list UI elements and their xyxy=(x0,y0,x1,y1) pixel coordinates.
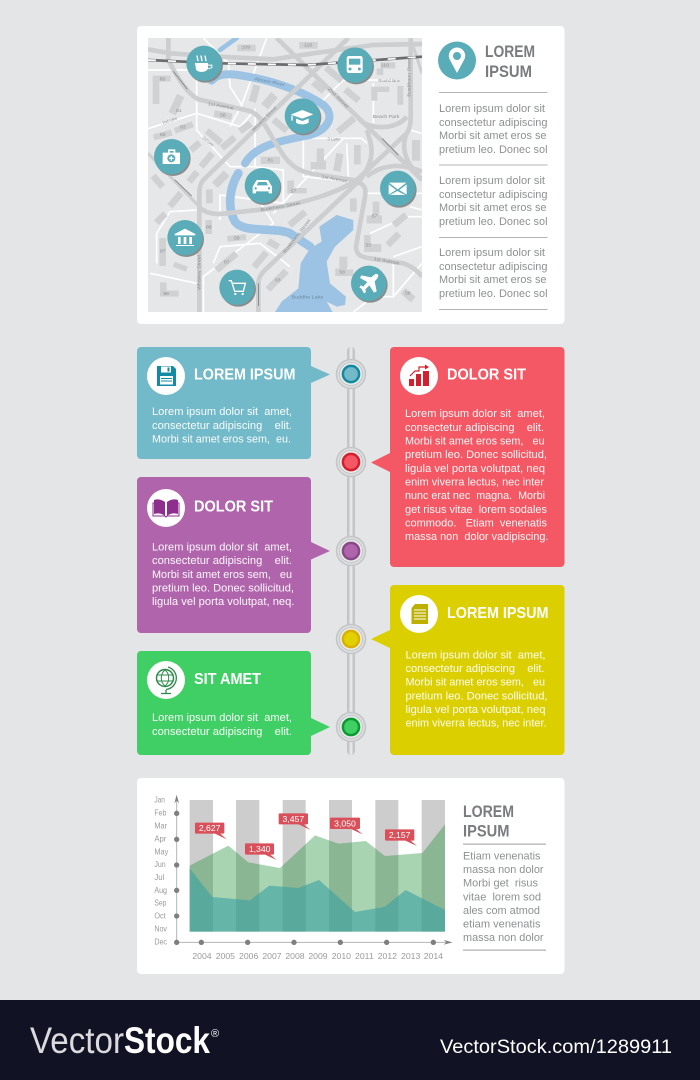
logo wordmark: Stock xyxy=(124,1020,210,1061)
callout: 2,627 xyxy=(195,823,227,839)
month labels: Dec xyxy=(154,936,168,946)
panel: green callout xyxy=(137,651,330,755)
callout: 2,627: 2,627 xyxy=(199,823,221,833)
text block: Morbi sit amet eros sem, eu xyxy=(152,569,292,581)
map labels: 81 xyxy=(268,158,274,163)
text block: location 1 xyxy=(439,103,548,156)
map labels: Beach Park xyxy=(373,114,400,119)
text block: ligula vel porta volutpat, neq. xyxy=(152,596,294,608)
year labels: 2004 xyxy=(192,951,212,961)
chart background bars xyxy=(190,800,445,932)
map labels: 83 xyxy=(180,125,186,130)
text block: massa non dolor vadipiscing. xyxy=(405,531,548,543)
year labels: 2005 xyxy=(216,951,235,961)
text block: ligula vel porta volutpat, neq xyxy=(405,463,545,475)
node: green xyxy=(336,712,366,742)
text block: Morbi sit amet eros sem, eu. xyxy=(152,434,291,446)
text block: chart description: ales com atmod xyxy=(463,905,540,917)
footer banner xyxy=(0,1000,700,1080)
node: red xyxy=(336,448,366,476)
logo wordmark xyxy=(30,1020,219,1061)
text block: Lorem ipsum dolor sit amet, xyxy=(405,408,545,420)
year labels: 2011 xyxy=(355,951,374,961)
text block xyxy=(152,406,292,446)
heading: map panel: LOREM xyxy=(485,43,535,61)
map labels: Buakhaou Street xyxy=(282,217,312,254)
map labels: 1st Avenue xyxy=(208,101,235,111)
month labels: Jun xyxy=(154,859,166,869)
text block: chart description xyxy=(463,850,544,944)
text block: chart description: massa non dolor xyxy=(463,932,544,944)
text block: location 1: consectetur adipiscing xyxy=(439,117,548,129)
callout: 1,340: 1,340 xyxy=(249,844,271,854)
text block: location 2 xyxy=(439,175,548,228)
location icon xyxy=(438,42,476,80)
map labels: 88 xyxy=(163,291,170,296)
node: blue xyxy=(336,360,366,388)
map labels: Buakhaou Street xyxy=(260,200,301,212)
map labels: 57 xyxy=(372,213,378,218)
month labels: Mar xyxy=(154,820,167,830)
text block: pretium leo. Donec sollicitud, xyxy=(152,582,294,594)
callout: 3,050 xyxy=(330,818,363,834)
year labels: 2012 xyxy=(378,951,397,961)
icon: rising bar chart xyxy=(400,357,438,395)
text block: enim viverra lectus, nec inter xyxy=(405,476,544,488)
text block: location 2: Morbi sit amet eros se xyxy=(439,202,546,214)
text block: ligula vel porta volutpat, neq xyxy=(406,704,546,716)
map labels: 58 xyxy=(405,291,411,296)
series: green area xyxy=(190,824,445,932)
callout: 3,050: 3,050 xyxy=(334,818,356,828)
month labels: Aug xyxy=(154,885,167,895)
map labels: Whiskey Street xyxy=(251,105,278,132)
heading: SIT AMET xyxy=(194,671,261,688)
heading: DOLOR SIT xyxy=(194,498,273,516)
panel: yellow callout xyxy=(371,585,564,755)
river and lake xyxy=(212,38,353,312)
panel: blue callout xyxy=(137,347,330,459)
icon: bank xyxy=(167,220,204,257)
text block: nunc erat nec magna. Morbi xyxy=(405,490,545,502)
map labels: 87 xyxy=(160,249,166,254)
icon: graduation cap xyxy=(285,98,321,135)
year labels: 2007 xyxy=(262,951,282,961)
buildings xyxy=(151,42,420,302)
map labels: Buddha Lake xyxy=(292,294,324,299)
icon: floppy disk xyxy=(147,357,185,395)
text block: chart description: vitae lorem sod xyxy=(463,892,541,904)
map labels: 82 xyxy=(160,132,166,137)
text block: consectetur adipiscing elit. xyxy=(152,726,292,738)
icon: bus xyxy=(337,47,374,84)
icon: car xyxy=(245,168,281,205)
text block: consectetur adipiscing elit. xyxy=(152,420,292,432)
image id: VectorStock.com/1289911 xyxy=(440,1036,672,1058)
panel: map and location list xyxy=(137,26,564,324)
icon: document xyxy=(400,595,438,633)
text block: location 3: Lorem ipsum dolor sit xyxy=(439,247,545,259)
icon: airplane xyxy=(351,266,388,303)
text block: location 3: Morbi sit amet eros se xyxy=(439,274,546,286)
map labels: 80 xyxy=(160,76,166,81)
text block: chart description: massa non dolor xyxy=(463,864,544,876)
map labels: 2nd Street xyxy=(327,86,351,110)
roads xyxy=(148,38,422,312)
text block: chart description: etiam venenatis xyxy=(463,918,541,930)
callout: 3,457 xyxy=(279,813,310,830)
map labels: 110 xyxy=(304,43,313,48)
icon: envelope xyxy=(380,171,417,208)
text block: location 2: consectetur adipiscing xyxy=(439,189,548,201)
map labels: 1st Avenue xyxy=(321,174,348,184)
heading: chart panel xyxy=(463,803,514,840)
heading: LOREM IPSUM xyxy=(194,366,296,384)
month labels: Feb xyxy=(154,808,166,818)
map labels: 2nd Lane xyxy=(201,135,215,148)
map labels: 3 Lane xyxy=(327,137,341,142)
month labels: Sep xyxy=(154,898,166,908)
year labels: 2010 xyxy=(332,951,351,961)
heading: LOREM IPSUM xyxy=(447,605,548,622)
callout: 1,340 xyxy=(245,843,277,860)
map labels: 58 xyxy=(339,269,346,274)
text block xyxy=(152,712,292,738)
month labels: Nov xyxy=(154,923,168,933)
text block: chart description: Morbi get risus xyxy=(463,878,538,890)
month labels: May xyxy=(154,846,169,856)
map labels: 88 xyxy=(206,225,212,230)
map labels: 83 xyxy=(275,278,281,283)
panel: purple callout xyxy=(137,477,330,633)
text block: consectetur adipiscing elit. xyxy=(406,663,544,675)
text block: get risus vitae lorem sodales xyxy=(405,504,547,516)
text block: commodo. Etiam venenatis xyxy=(405,518,547,530)
text block: location 3 xyxy=(439,247,548,300)
icon: open book xyxy=(147,489,185,527)
callout: 3,457: 3,457 xyxy=(282,814,304,824)
area chart xyxy=(154,795,453,961)
map labels: 58 xyxy=(234,235,240,240)
panel: red callout xyxy=(371,347,564,567)
icon: shopping cart xyxy=(219,270,256,307)
node: yellow xyxy=(336,624,366,654)
text block: location 1: Morbi sit amet eros se xyxy=(439,130,546,142)
logo wordmark: ® xyxy=(211,1028,219,1040)
month labels xyxy=(154,795,169,946)
heading: chart panel: LOREM xyxy=(463,803,514,821)
map labels: 109 xyxy=(242,45,251,50)
callout: 2,157: 2,157 xyxy=(389,830,411,840)
axes xyxy=(174,795,453,945)
text block: pretium leo. Donec sollicitud, xyxy=(405,449,547,461)
heading: chart panel: IPSUM xyxy=(463,822,510,840)
map xyxy=(148,38,422,312)
map labels: 2nd Lane xyxy=(162,115,178,126)
text block xyxy=(406,650,548,730)
map labels: 110 xyxy=(381,63,390,68)
icon: globe xyxy=(147,661,185,699)
text block: location 3: consectetur adipiscing xyxy=(439,261,548,273)
map labels: 1st Avenue xyxy=(374,256,401,266)
map labels: 53 xyxy=(365,243,372,248)
year labels: 2006 xyxy=(239,951,258,961)
panel: area chart xyxy=(137,778,564,974)
map labels: Absent River xyxy=(254,76,286,87)
text block: Lorem ipsum dolor sit amet, xyxy=(152,542,292,554)
month labels: Jul xyxy=(154,872,164,882)
year labels: 2013 xyxy=(401,951,420,961)
callout: 2,157 xyxy=(385,829,417,846)
text block: location 2: pretium leo. Donec sol xyxy=(439,216,548,228)
road arrows xyxy=(173,71,398,306)
text block: chart description: Etiam venenatis xyxy=(463,850,541,862)
series: teal area xyxy=(190,868,445,932)
map labels: Buakhaou Street xyxy=(407,56,412,97)
year labels: 2009 xyxy=(308,951,328,961)
text block: enim viverra lectus, nec inter. xyxy=(406,718,546,730)
text block: Lorem ipsum dolor sit amet, xyxy=(406,650,546,662)
map labels: 57 xyxy=(291,189,297,194)
text block: consectetur adipiscing elit. xyxy=(405,422,544,434)
text block: Lorem ipsum dolor sit amet, xyxy=(152,712,292,724)
timeline spine with nodes xyxy=(336,347,366,755)
icon: coffee cup xyxy=(186,46,223,83)
text block: pretium leo. Donec sollicitud, xyxy=(406,690,548,702)
map labels: 87 xyxy=(224,259,230,264)
text block: location 1: pretium leo. Donec sol xyxy=(439,144,548,156)
text block: location 2: Lorem ipsum dolor sit xyxy=(439,175,545,187)
node: purple xyxy=(336,536,366,566)
map labels: 58 xyxy=(220,113,226,118)
railway xyxy=(148,57,422,65)
year labels: 2014 xyxy=(424,951,443,961)
heading: map panel xyxy=(485,43,535,81)
text block: location 3: pretium leo. Donec sol xyxy=(439,288,548,300)
heading: map panel: IPSUM xyxy=(485,63,532,81)
map labels xyxy=(160,43,412,299)
icon: medical case xyxy=(154,139,191,176)
text block: location 1: Lorem ipsum dolor sit xyxy=(439,103,545,115)
text block: Lorem ipsum dolor sit amet, xyxy=(152,406,292,418)
text block xyxy=(405,408,548,543)
month labels: Jan xyxy=(154,795,165,805)
heading: DOLOR SIT xyxy=(447,366,526,384)
month labels: Apr xyxy=(154,833,166,843)
text block: consectetur adipiscing elit. xyxy=(152,555,292,567)
map labels: 81 xyxy=(176,108,182,113)
year labels: 2008 xyxy=(285,951,305,961)
year labels xyxy=(192,951,443,961)
text block: Morbi sit amet eros sem, eu xyxy=(405,436,544,448)
text block xyxy=(152,542,294,608)
text block: Morbi sit amet eros sem, eu xyxy=(406,676,545,688)
map labels: Round lane xyxy=(378,78,401,83)
month labels: Oct xyxy=(154,911,166,921)
map labels: Whiskey Street xyxy=(197,254,202,290)
logo wordmark: Vector xyxy=(30,1020,124,1061)
